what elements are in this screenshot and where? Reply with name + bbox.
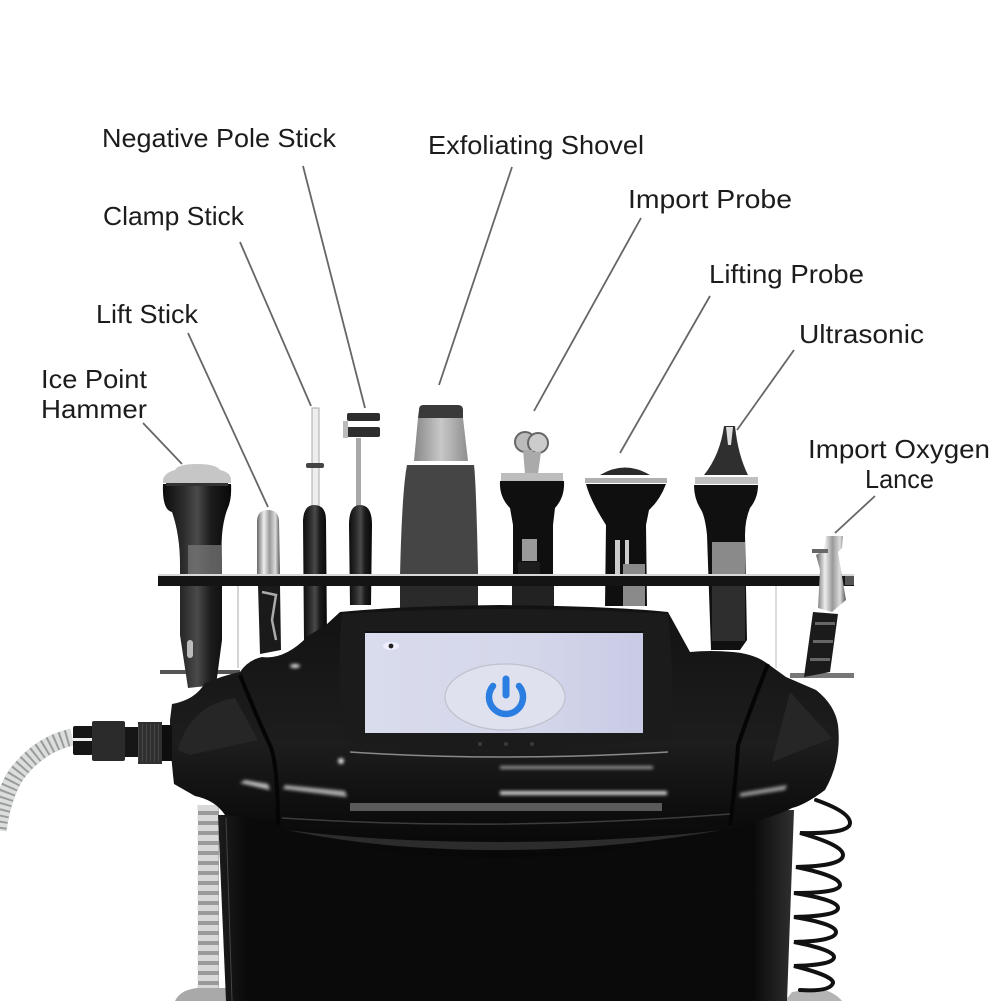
label: Ultrasonic: Ultrasonic bbox=[799, 319, 924, 349]
label: Exfoliating Shovel: Exfoliating Shovel bbox=[428, 130, 644, 160]
touch screen bbox=[339, 609, 672, 757]
label: Import Oxygen Lance: Import Oxygen bbox=[808, 434, 990, 464]
lower lip bbox=[287, 830, 722, 850]
dark vent strip bbox=[350, 803, 662, 811]
main unit shell bbox=[170, 605, 839, 1001]
rack supports bbox=[160, 586, 854, 678]
label: Clamp Stick: Clamp Stick bbox=[103, 201, 245, 231]
handpiece: lift stick bbox=[257, 510, 281, 654]
cabinet bbox=[218, 810, 794, 1001]
hose: left corrugated bbox=[0, 737, 72, 830]
leader lines bbox=[143, 166, 875, 533]
label: Import Oxygen Lance bbox=[808, 434, 990, 494]
power button bbox=[445, 664, 565, 730]
handpiece: ice point hammer bbox=[163, 464, 231, 688]
label: Ice Point Hammer: Hammer bbox=[41, 394, 147, 424]
handpiece: clamp stick bbox=[303, 408, 327, 640]
handpiece: exfoliating shovel bbox=[400, 405, 478, 610]
handpiece: import probe bbox=[500, 432, 564, 606]
label: Ice Point Hammer bbox=[41, 364, 148, 424]
label: Lifting Probe: Lifting Probe bbox=[709, 259, 864, 289]
label: Import Probe: Import Probe bbox=[628, 184, 792, 214]
handpiece: negative pole stick bbox=[343, 413, 380, 605]
handpiece: lifting probe bbox=[585, 468, 667, 606]
coiled cable: right bbox=[794, 800, 850, 990]
highlights bbox=[240, 664, 787, 797]
label: Import Oxygen Lance: Lance bbox=[865, 464, 934, 494]
connector bbox=[73, 721, 172, 764]
base castors bbox=[175, 988, 842, 1001]
handpiece: ultrasonic bbox=[694, 426, 758, 650]
label: Lift Stick: Lift Stick bbox=[96, 299, 199, 329]
shoulder sculpting bbox=[178, 664, 832, 825]
indicator dots bbox=[478, 742, 534, 746]
icon: settings dot bbox=[383, 642, 399, 650]
hose: vertical corrugated bbox=[198, 805, 219, 1001]
label: Ice Point Hammer: Ice Point bbox=[41, 364, 148, 394]
handpiece: import oxygen lance bbox=[804, 536, 854, 677]
rack bar bbox=[158, 574, 854, 586]
label: Negative Pole Stick: Negative Pole Stick bbox=[102, 123, 337, 153]
labels bbox=[41, 123, 990, 494]
